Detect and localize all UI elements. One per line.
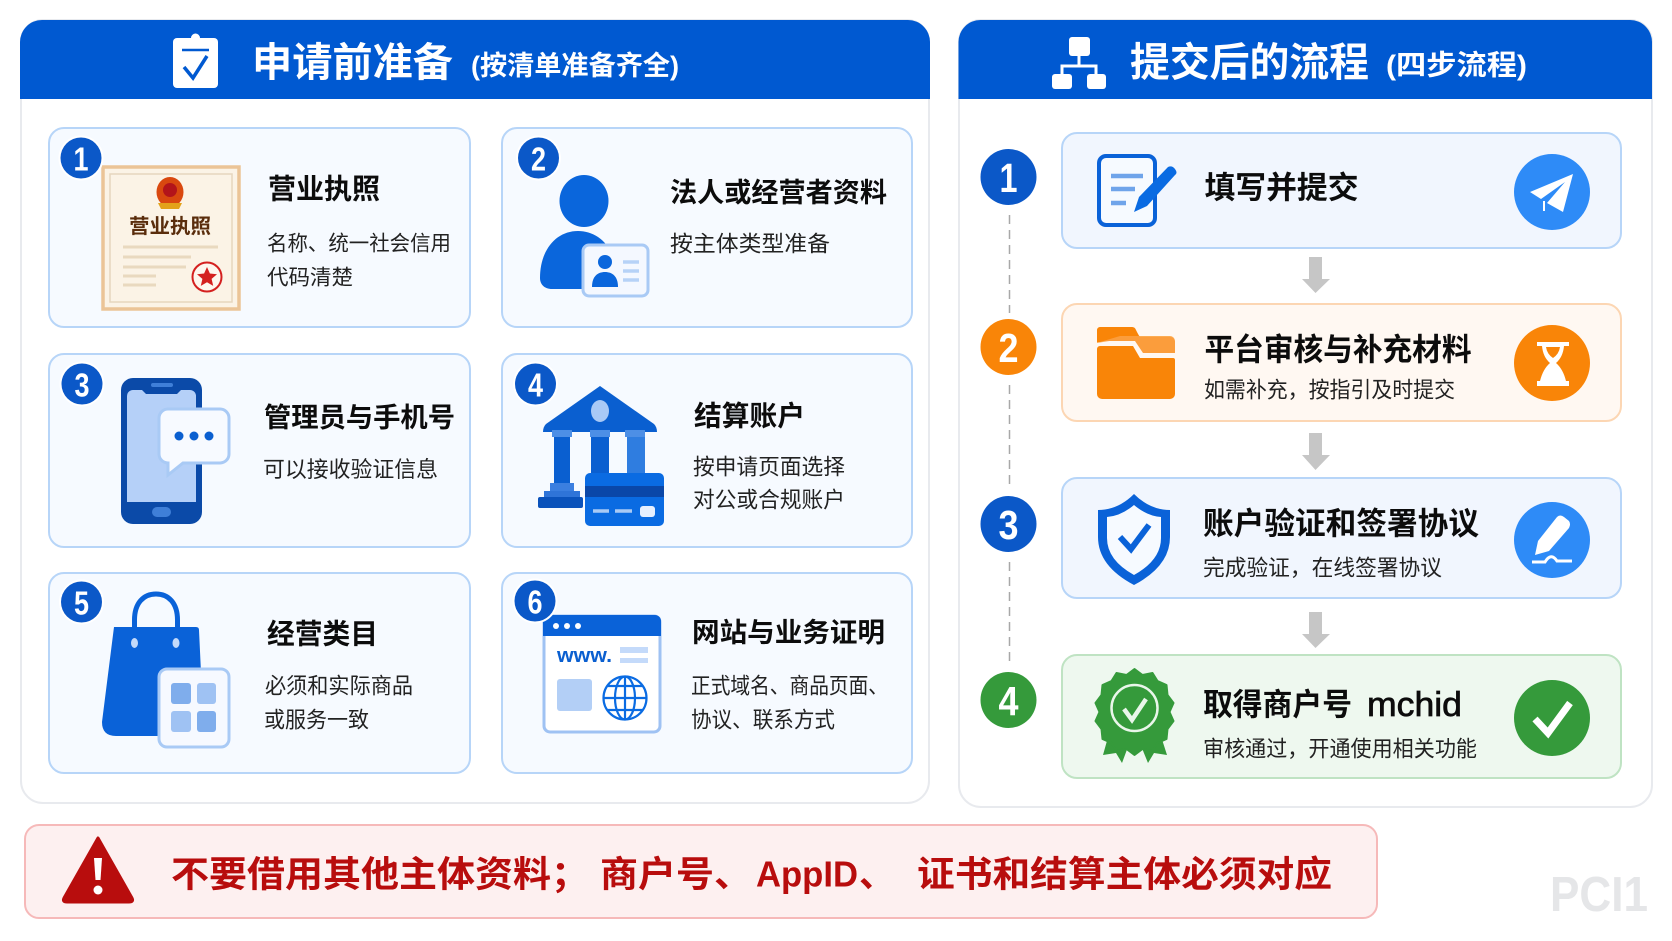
card title: 结算账户 xyxy=(694,400,805,432)
card title: 网站与业务证明 xyxy=(692,618,885,648)
card description: 或服务一致 xyxy=(264,708,369,732)
card description xyxy=(267,232,451,290)
card 2: legal person documents xyxy=(502,128,912,327)
card title: 经营类目 xyxy=(267,618,378,650)
watermark: PCI1 xyxy=(1550,868,1648,922)
step title: 取得商户号 xyxy=(1203,688,1352,722)
card 4: settlement account xyxy=(502,354,912,547)
badge 5: 5 xyxy=(74,584,89,622)
badge 3 xyxy=(60,362,104,406)
warning text: 证书和结算主体必须对应 xyxy=(917,854,1332,894)
card 5: business category xyxy=(49,573,470,773)
icon: shield check xyxy=(1098,494,1170,585)
step badge 2: 2 xyxy=(998,325,1018,371)
warning text: 不要借用其他主体资料； xyxy=(171,854,589,894)
arrow: step 3 to 4 xyxy=(1302,612,1330,648)
card description: 正式域名、商品页面、 xyxy=(691,674,888,698)
card description: 协议、联系方式 xyxy=(691,708,835,732)
icon: phone with chat bubble xyxy=(121,378,229,524)
warning text: AppID xyxy=(756,854,858,894)
step badge 3 xyxy=(980,496,1036,552)
icon: clipboard check xyxy=(173,34,218,88)
card description: 按申请页面选择 xyxy=(693,454,845,480)
badge 4: 4 xyxy=(528,366,544,404)
step badge 2 xyxy=(980,319,1036,375)
icon: browser with globe xyxy=(543,615,661,732)
step badge 1 xyxy=(980,149,1036,205)
panel header: preparation xyxy=(20,20,930,99)
step 1: fill and submit xyxy=(1062,133,1621,248)
card title: 法人或经营者资料 xyxy=(670,178,887,208)
icon: paper plane xyxy=(1514,154,1590,230)
step title: mchid xyxy=(1367,686,1462,724)
badge 6: 6 xyxy=(528,584,542,620)
step title xyxy=(1203,686,1462,724)
badge 1 xyxy=(58,136,104,180)
card description: 对公或合规账户 xyxy=(693,488,845,512)
icon: hierarchy xyxy=(1052,37,1106,89)
card description: 必须和实际商品 xyxy=(265,674,413,698)
step title: 账户验证和签署协议 xyxy=(1203,506,1479,542)
badge 6 xyxy=(512,578,558,624)
step badge 4: 4 xyxy=(998,678,1019,724)
card description xyxy=(693,454,845,512)
icon: shopping bag with grid xyxy=(102,594,229,747)
step badge 1: 1 xyxy=(1000,155,1018,201)
card description: 按主体类型准备 xyxy=(670,232,830,256)
warning text xyxy=(171,854,1332,894)
card 3: admin and phone xyxy=(49,354,470,547)
icon: bank and credit card xyxy=(538,386,664,526)
badge 5 xyxy=(59,580,104,624)
badge 3: 3 xyxy=(74,366,90,404)
card 1: business license xyxy=(49,128,470,327)
icon: browser with globe: www. xyxy=(556,645,612,667)
icon: document and pencil xyxy=(1099,156,1176,225)
icon: warning triangle xyxy=(63,838,133,902)
icon: folder xyxy=(1097,327,1175,399)
step title: 平台审核与补充材料 xyxy=(1204,332,1472,368)
icon: license certificate xyxy=(103,167,239,309)
warning text: 、 xyxy=(859,854,895,894)
badge 4 xyxy=(513,362,558,406)
card 6: website and business proof xyxy=(502,573,912,773)
step title: 填写并提交 xyxy=(1204,170,1358,206)
warning text: 商户号、 xyxy=(600,854,752,894)
step badge 3: 3 xyxy=(998,502,1018,548)
step description: 审核通过，开通使用相关功能 xyxy=(1203,736,1477,762)
icon: award rosette xyxy=(1096,669,1174,763)
arrow: step 2 to 3 xyxy=(1302,433,1330,470)
icon: check circle xyxy=(1514,680,1590,756)
step description: 如需补充，按指引及时提交 xyxy=(1204,378,1455,402)
badge 2 xyxy=(516,136,561,180)
card description: 名称、统一社会信用 xyxy=(267,232,451,256)
card description: 代码清楚 xyxy=(267,266,353,290)
heading note: preparation: (按清单准备齐全) xyxy=(471,51,679,81)
badge 2: 2 xyxy=(531,140,546,178)
card title: 营业执照 xyxy=(268,174,380,204)
warning banner xyxy=(25,825,1377,918)
step badge 4 xyxy=(980,672,1036,728)
card description xyxy=(264,674,413,732)
step description: 完成验证，在线签署协议 xyxy=(1203,556,1442,580)
dashed timeline xyxy=(1008,215,1010,665)
panel: preparation before applying xyxy=(20,20,930,803)
badge 1: 1 xyxy=(74,140,88,178)
icon: pen signing xyxy=(1514,502,1590,578)
step 4: obtain merchant id xyxy=(1062,655,1621,778)
step 3: verification and agreement xyxy=(1062,478,1621,598)
card description xyxy=(691,674,888,732)
icon: license certificate: 营业执照 xyxy=(129,215,211,238)
heading note: process: (四步流程) xyxy=(1386,50,1527,80)
panel: process after submission xyxy=(958,20,1652,807)
arrow: step 1 to 2 xyxy=(1302,257,1330,293)
icon: person with id card xyxy=(540,175,648,296)
card description: 可以接收验证信息 xyxy=(263,457,438,482)
step 2: platform review xyxy=(1062,304,1621,421)
heading: preparation: 申请前准备 xyxy=(252,41,453,85)
card title: 管理员与手机号 xyxy=(264,403,455,433)
icon: hourglass xyxy=(1514,325,1590,401)
panel header: process xyxy=(958,20,1652,99)
heading: process: 提交后的流程 xyxy=(1130,41,1369,85)
